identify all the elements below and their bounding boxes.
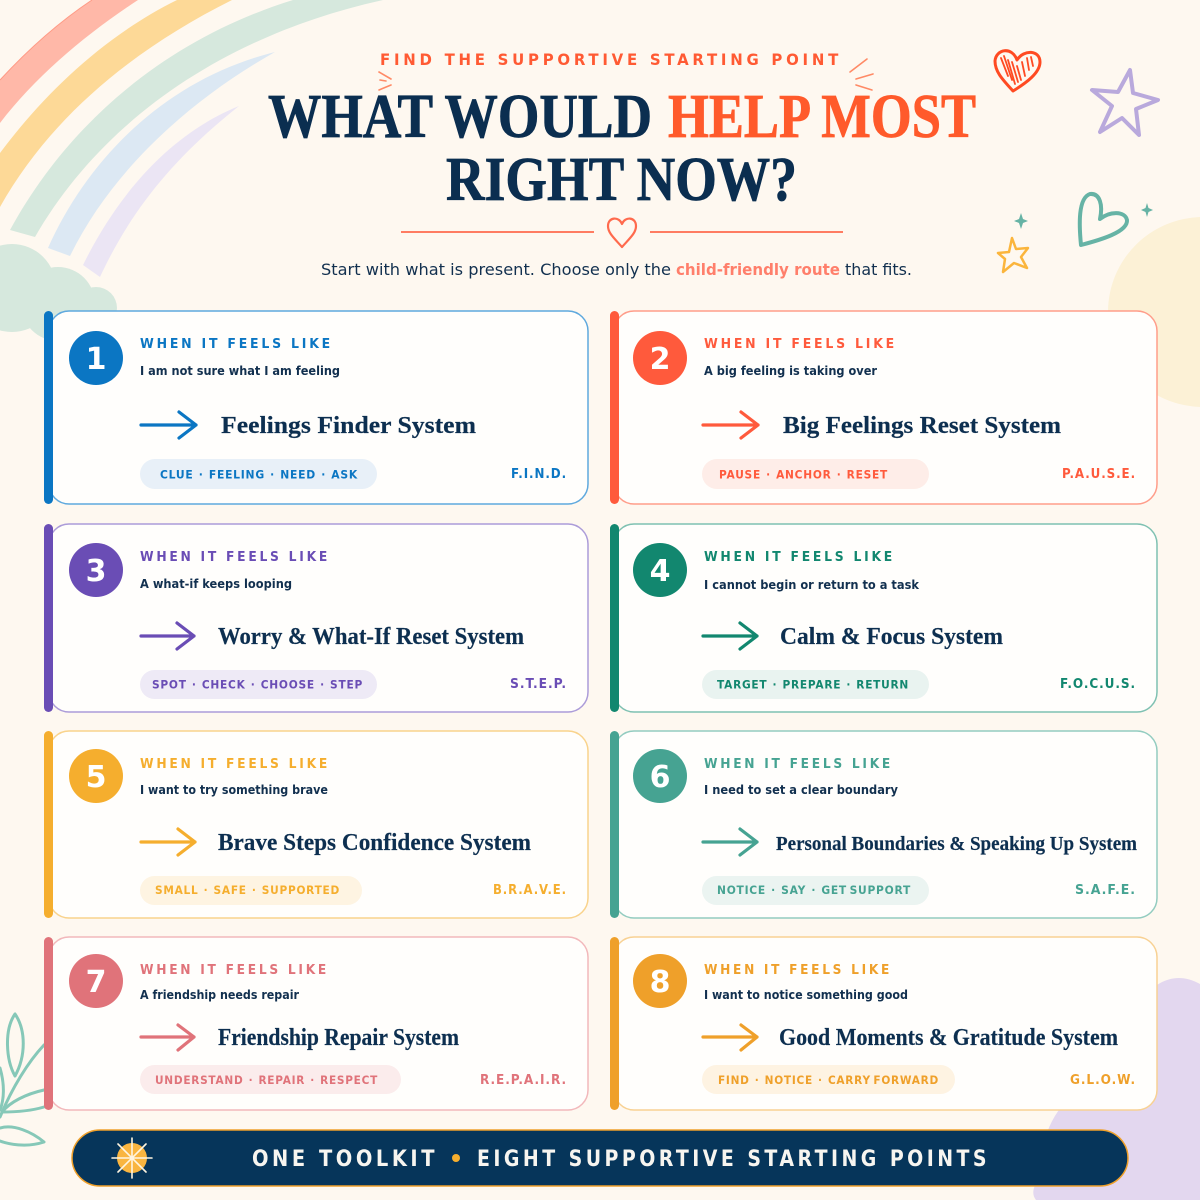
- panel: card 5 brave steps: WHEN IT FEELS LIKE: [140, 756, 330, 772]
- panel: card 6 personal boundaries: [610, 731, 1157, 918]
- panel: card 2 big feelings reset: PAUSE · ANCHOR · RESET: [719, 468, 888, 482]
- icon: teal heart: [1080, 194, 1127, 245]
- panel: card 1 feelings finder: Feelings Finder System: [221, 413, 476, 439]
- title: [268, 83, 976, 214]
- panel: card 7 friendship repair: UNDERSTAND · REPAIR · RESPECT: [155, 1073, 378, 1087]
- panel: card 1 feelings finder: [44, 311, 588, 504]
- icon: teal sparkles: [1014, 203, 1153, 229]
- panel: card 2 big feelings reset: WHEN IT FEELS LIKE: [704, 336, 897, 352]
- panel: card 2 big feelings reset: A big feeling is taking over: [704, 364, 877, 378]
- header sparks: [379, 59, 873, 90]
- panel: card 8 good moments: WHEN IT FEELS LIKE: [704, 962, 892, 978]
- panel: card 6 personal boundaries: 6: [650, 760, 670, 795]
- subtitle: Start with what is present. Choose only the: [321, 260, 671, 279]
- icon: yellow star: [998, 238, 1028, 272]
- panel: card 5 brave steps: SMALL · SAFE · SUPPORTED: [155, 883, 340, 897]
- panel: card 6 personal boundaries: I need to set a clear boundary: [704, 783, 898, 797]
- footer banner: [72, 1130, 1128, 1186]
- icon: red scribble heart: [995, 51, 1040, 91]
- panel: card 5 brave steps: 5: [86, 760, 106, 795]
- panel: card 7 friendship repair: [44, 937, 588, 1110]
- panel: card 8 good moments: G.L.O.W.: [1070, 1073, 1136, 1088]
- panel: card 5 brave steps: [44, 731, 588, 918]
- footer text: ONE TOOLKIT: [252, 1147, 438, 1172]
- panel: card 4 calm and focus: F.O.C.U.S.: [1060, 677, 1136, 692]
- panel: card 6 personal boundaries: S.A.F.E.: [1075, 883, 1136, 898]
- panel: card 2 big feelings reset: [610, 311, 1157, 504]
- panel: card 1 feelings finder: WHEN IT FEELS LIKE: [140, 336, 333, 352]
- panel: card 5 brave steps: Brave Steps Confidence System: [218, 830, 531, 856]
- yellow corner blob: [1108, 217, 1200, 407]
- panel: card 5 brave steps: B.R.A.V.E.: [493, 883, 567, 898]
- panel: card 2 big feelings reset: 2: [650, 342, 670, 377]
- panel: card 4 calm and focus: WHEN IT FEELS LIKE: [704, 549, 895, 565]
- panel: card 3 worry reset: A what-if keeps looping: [140, 577, 292, 591]
- panel: card 7 friendship repair: WHEN IT FEELS LIKE: [140, 962, 329, 978]
- panel: card 5 brave steps: I want to try something brave: [140, 783, 328, 797]
- panel: card 2 big feelings reset: P.A.U.S.E.: [1062, 467, 1136, 482]
- panel: card 3 worry reset: S.T.E.P.: [510, 677, 567, 692]
- panel: card 1 feelings finder: I am not sure what I am feeling: [140, 364, 340, 378]
- icon: sun compass: [112, 1138, 152, 1178]
- icon: purple star: [1092, 70, 1158, 135]
- rainbow decoration: [0, 0, 383, 277]
- panel: card 4 calm and focus: I cannot begin or return to a task: [704, 578, 920, 592]
- panel: card 4 calm and focus: TARGET · PREPARE · RETURN: [717, 678, 909, 692]
- panel: card 7 friendship repair: A friendship needs repair: [140, 988, 299, 1002]
- panel: card 2 big feelings reset: Big Feelings Reset System: [783, 413, 1061, 439]
- panel: card 6 personal boundaries: WHEN IT FEELS LIKE: [704, 756, 893, 772]
- panel: card 3 worry reset: 3: [86, 554, 106, 589]
- panel: card 7 friendship repair: 7: [86, 965, 106, 1000]
- footer text: [252, 1147, 990, 1172]
- panel: card 1 feelings finder: CLUE · FEELING · NEED · ASK: [160, 468, 358, 482]
- subtitle: child-friendly route: [676, 260, 840, 279]
- panel: card 3 worry reset: SPOT · CHECK · CHOOSE · STEP: [152, 678, 363, 692]
- cloud decoration: [0, 244, 117, 341]
- footer text: EIGHT SUPPORTIVE STARTING POINTS: [477, 1147, 990, 1172]
- panel: card 3 worry reset: WHEN IT FEELS LIKE: [140, 549, 330, 565]
- panel: card 8 good moments: Good Moments & Gratitude System: [779, 1025, 1118, 1051]
- panel: card 8 good moments: I want to notice something good: [704, 988, 908, 1002]
- title: RIGHT NOW?: [446, 146, 797, 214]
- title: WHAT WOULD: [268, 83, 652, 151]
- title: HELP MOST: [668, 83, 976, 151]
- panel: card 4 calm and focus: Calm & Focus System: [780, 624, 1003, 650]
- subtitle: that fits.: [845, 260, 912, 279]
- header kicker: FIND THE SUPPORTIVE STARTING POINT: [380, 50, 842, 69]
- lavender corner blob: [1033, 978, 1200, 1200]
- panel: card 8 good moments: 8: [650, 965, 670, 1000]
- panel: card 7 friendship repair: Friendship Repair System: [218, 1025, 459, 1051]
- panel: card 3 worry reset: Worry & What-If Reset System: [218, 624, 524, 650]
- panel: card 7 friendship repair: R.E.P.A.I.R.: [480, 1073, 567, 1088]
- subtitle: [321, 260, 912, 279]
- panel: card 3 worry reset: [44, 524, 588, 712]
- title divider with heart: [401, 219, 843, 247]
- panel: card 6 personal boundaries: Personal Boundaries & Speaking Up System: [776, 833, 1137, 855]
- plant decoration: [0, 1014, 44, 1145]
- panel: card 4 calm and focus: [610, 524, 1157, 712]
- panel: card 8 good moments: [610, 937, 1157, 1110]
- panel: card 1 feelings finder: F.I.N.D.: [511, 467, 567, 482]
- panel: card 8 good moments: FIND · NOTICE · CARRY FORWARD: [718, 1073, 939, 1087]
- panel: card 1 feelings finder: 1: [86, 342, 106, 377]
- panel: card 4 calm and focus: 4: [650, 554, 670, 589]
- panel: card 6 personal boundaries: NOTICE · SAY · GET SUPPORT: [717, 883, 911, 897]
